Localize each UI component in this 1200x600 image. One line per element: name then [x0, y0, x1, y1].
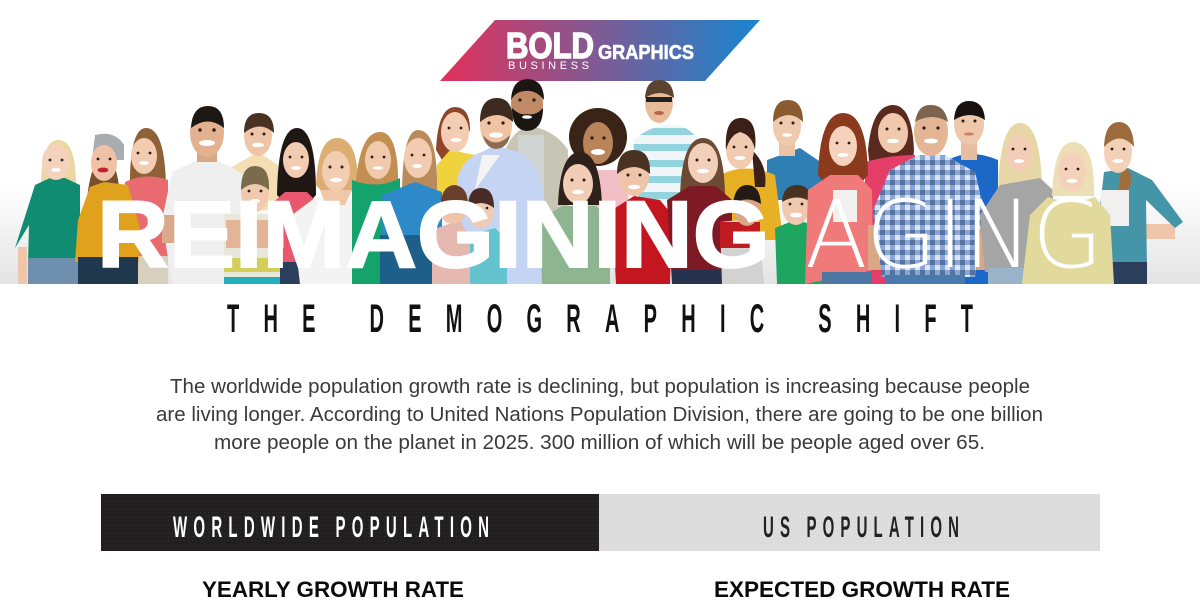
- person: man with glasses: [633, 80, 703, 210]
- person: blonde woman in grey sweater: [980, 123, 1053, 284]
- person: plaid-shirted woman with ponytail: [1093, 122, 1183, 284]
- person: man in light blue shirt: [457, 98, 545, 284]
- logo banner: [440, 20, 760, 81]
- person: woman in dark pink top: [865, 105, 915, 284]
- person: boy in red shirt: [612, 150, 672, 284]
- headline: REIMAGINING AGING: [102, 198, 1094, 269]
- person: woman with curly hair: [569, 108, 630, 215]
- logo banner: GRAPHICS: [598, 42, 694, 64]
- tab: us population: US POPULATION: [763, 512, 959, 545]
- person: little boy: [720, 185, 764, 284]
- person: green-shirt boy: [775, 185, 823, 284]
- subtitle: THE DEMOGRAPHIC SHIFT: [227, 295, 973, 341]
- person: girl in green dress: [540, 152, 610, 284]
- person: blonde woman in pale yellow sweater: [1022, 142, 1114, 284]
- logo banner: BUSINESS: [508, 60, 589, 72]
- hero photo: group of people: [0, 79, 1200, 290]
- intro paragraph: The worldwide population growth rate is declining, but population is increasing because people: [170, 376, 1030, 398]
- person: man in blue t-shirt: [948, 101, 998, 284]
- person: woman in coral vest: [805, 113, 873, 284]
- person: blonde woman in white tee: [294, 138, 358, 284]
- person: small child with floral top: [432, 185, 470, 284]
- person: woman in teal sweater: [15, 140, 80, 284]
- tab: us population: [599, 494, 1100, 551]
- person: teen in plaid shirt: [767, 100, 825, 200]
- intro paragraph: are living longer. According to United Nations Population Division, there are going to be one billion: [156, 404, 1043, 426]
- person: man in cream shirt: [230, 113, 280, 210]
- person: small girl in aqua top: [468, 188, 507, 284]
- person: dark-haired woman: [274, 128, 316, 284]
- person: man in white polo: [162, 106, 248, 284]
- person: man in plaid shirt: [868, 105, 990, 284]
- tab: worldwide population: [101, 494, 599, 551]
- person: girl in plaid red shirt: [667, 138, 732, 284]
- logo banner: BOLD: [506, 25, 594, 66]
- person: woman in blue top: [380, 130, 442, 284]
- intro paragraph: more people on the planet in 2025. 300 million of which will be people aged over 65.: [214, 432, 985, 454]
- person: boy in striped shirt: [224, 166, 284, 284]
- person: bearded man: [506, 79, 569, 212]
- headline: REIMAGINING AGING: AGING: [805, 181, 1103, 290]
- person: woman in yellow top: [436, 107, 475, 200]
- tab: worldwide population: WORLDWIDE POPULATION: [173, 512, 489, 545]
- person: woman in yellow sweater with grey hat: [75, 134, 142, 284]
- intro paragraph: [156, 376, 1043, 454]
- person: woman in green top: [352, 132, 400, 284]
- person: asian woman in yellow: [720, 118, 783, 240]
- headline: REIMAGINING AGING: REIMAGINING: [97, 182, 770, 288]
- person: woman in pink top with long hair: [125, 128, 168, 284]
